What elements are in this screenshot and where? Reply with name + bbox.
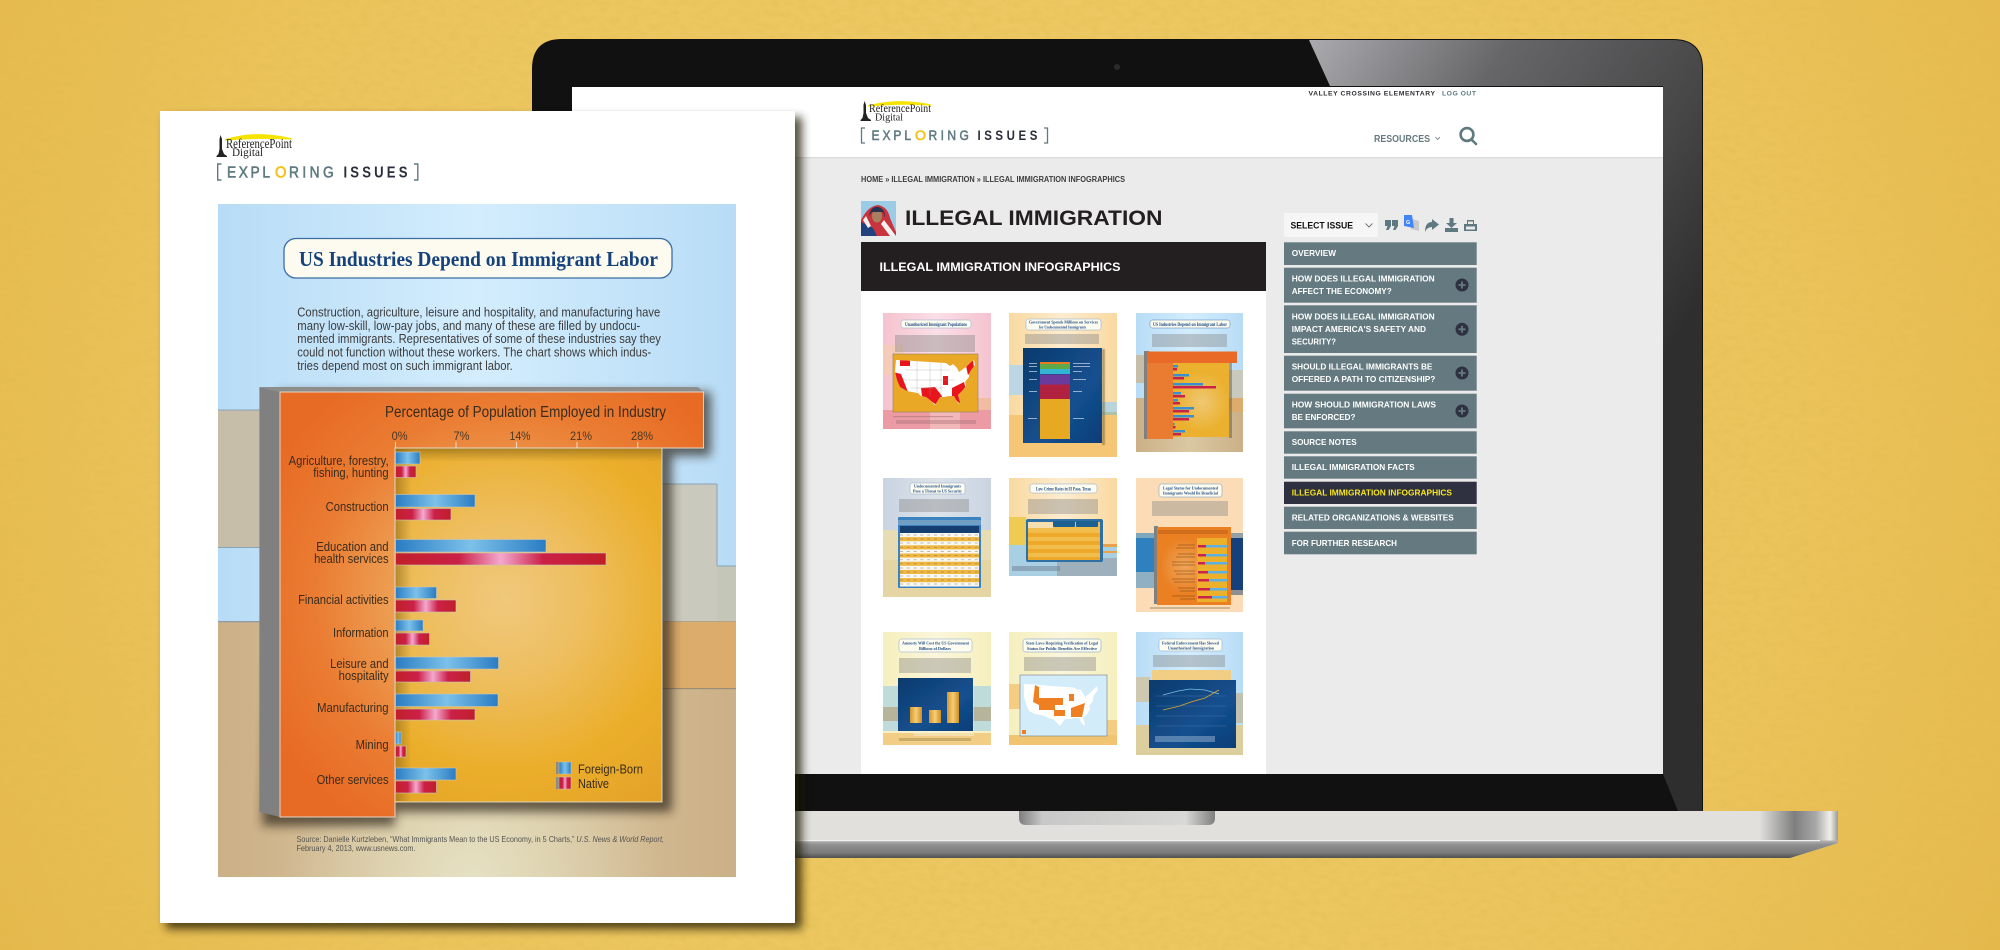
thumbnail: state verification laws map: Status for Public Benefits Are Effective (1027, 646, 1097, 651)
intro paragraph (297, 304, 661, 373)
category labels: Education and (316, 539, 389, 554)
menu item: SECURITY? (1292, 336, 1336, 346)
thumbnail: amnesty cost bar chart (883, 632, 991, 745)
menu item (1284, 507, 1477, 529)
menu item: AFFECT THE ECONOMY? (1292, 286, 1392, 296)
menu item: SHOULD ILLEGAL IMMIGRANTS BE (1292, 362, 1433, 372)
thumbnail: state verification laws map (1009, 632, 1117, 745)
menu item (1284, 305, 1477, 353)
issue title: ILLEGAL IMMIGRATION (905, 207, 1162, 230)
resources menu: RESOURCES (1374, 134, 1430, 145)
category labels (289, 453, 389, 787)
thumbnail: US industries depend on immigrant labor (1136, 313, 1243, 452)
menu item: HOW DOES ILLEGAL IMMIGRATION (1292, 274, 1435, 284)
thumbnail: federal enforcement line chart: Federal Enforcement Has Slowed (1162, 640, 1219, 646)
chart plot area (395, 448, 662, 802)
site wordmark: Exploring Issues: RING (928, 127, 969, 143)
category labels: Financial activities (298, 592, 389, 607)
x axis: 7% (454, 429, 470, 443)
thumbnail: legal status would be beneficial: Legal Status for Undocumented (1163, 486, 1218, 490)
menu item: active: ILLEGAL IMMIGRATION INFOGRAPHICS (1292, 487, 1452, 497)
thumbnail: US industries depend on immigrant labor: US Industries Depend on Immigrant Labor (1153, 323, 1228, 328)
menu item: RELATED ORGANIZATIONS & WEBSITES (1292, 513, 1454, 523)
menu item (1284, 456, 1477, 479)
intro paragraph: tries depend most on such immigrant labor. (297, 358, 513, 373)
site wordmark: Exploring Issues: O (915, 127, 926, 143)
thumbnail: threat to US security table: Undocumented Immigrants (914, 484, 961, 489)
source note: February 4, 2013, www.usnews.com. (296, 843, 416, 853)
logo: ReferencePoint Digital (216, 135, 292, 159)
gallery heading bar: ILLEGAL IMMIGRATION INFOGRAPHICS (880, 262, 1121, 274)
x axis: 14% (510, 429, 531, 443)
menu item: IMPACT AMERICA'S SAFETY AND (1292, 324, 1426, 334)
thumbnail: low crime rates in El Paso (1009, 478, 1117, 576)
wordmark: Exploring Issues: EXPL (227, 164, 270, 182)
menu item: OFFERED A PATH TO CITIZENSHIP? (1292, 374, 1435, 384)
icon: download (1445, 218, 1458, 232)
thumbnail: government spending: Government Spends Millions on Services (1029, 320, 1098, 325)
issue photo: person in flag (861, 201, 896, 236)
intro paragraph: mented immigrants. Representatives of some of these industries say they (297, 331, 661, 346)
thumbnail: amnesty cost bar chart: Amnesty Will Cost the US Government (902, 640, 969, 646)
site wordmark: Exploring Issues (862, 127, 1048, 143)
category labels: Construction (326, 499, 389, 514)
site logo: ReferencePoint Digital (860, 101, 932, 124)
sidebar navigation (1284, 242, 1477, 554)
menu item: ILLEGAL IMMIGRATION FACTS (1292, 462, 1415, 472)
thumbnail: federal enforcement line chart (1136, 632, 1243, 755)
site logo: ReferencePoint Digital: Digital (875, 112, 903, 124)
toolbar icons (1385, 215, 1477, 232)
menu item: HOW DOES ILLEGAL IMMIGRATION (1292, 311, 1435, 321)
intro paragraph: could not function without these workers. The chart shows which indus- (297, 344, 651, 360)
x axis (392, 429, 653, 448)
thumbnail: low crime rates in El Paso: Low Crime Rates in El Paso, Texas (1036, 487, 1091, 492)
category labels: hospitality (339, 668, 389, 683)
menu item: BE ENFORCED? (1292, 412, 1355, 422)
x axis: 28% (631, 429, 653, 443)
icon: share (1425, 219, 1439, 232)
thumbnail: state verification laws map: State Laws Requiring Verification of Legal (1026, 640, 1099, 646)
paper shadow (166, 117, 802, 929)
account links: LOG OUT (1442, 90, 1477, 97)
x axis: 21% (570, 429, 592, 443)
menu item (1284, 356, 1477, 391)
thumbnail: government spending: for Undocumented Immigrants (1039, 324, 1086, 330)
category labels: Mining (356, 737, 389, 752)
infographic artwork (218, 204, 736, 877)
chart header and label column (280, 392, 704, 817)
menu item (1284, 431, 1477, 454)
issue selector (1284, 213, 1378, 237)
logo: ReferencePoint Digital: Digital (232, 145, 264, 159)
site header bar (572, 87, 1663, 158)
legend (556, 762, 643, 791)
bars (396, 452, 606, 793)
thumbnail: legal status would be beneficial: Immigrants Would Be Beneficial (1163, 490, 1219, 496)
laptop (532, 39, 1838, 858)
site wordmark: Exploring Issues: EXPL (872, 127, 911, 143)
icon: search (1461, 128, 1476, 144)
category labels: Agriculture, forestry, (289, 453, 389, 468)
thumbnail: federal enforcement line chart: Unauthorized Immigration (1168, 646, 1214, 650)
legend: Native (578, 776, 609, 791)
menu item (1284, 532, 1477, 554)
thumbnail: amnesty cost bar chart: Billions of Dollars (919, 646, 951, 651)
category labels: Other services (317, 772, 389, 787)
thumbnail: legal status would be beneficial (1136, 478, 1243, 612)
menu item: SOURCE NOTES (1292, 437, 1357, 447)
menu item: OVERVIEW (1292, 248, 1337, 258)
category labels: Manufacturing (317, 700, 389, 715)
icon: quote (1385, 220, 1398, 230)
category labels: fishing, hunting (313, 465, 389, 480)
thumbnail: unauthorized immigrant populations: Unauthorized Immigrant Populations (905, 323, 967, 328)
menu item (1284, 268, 1477, 303)
laptop lid and bezel (532, 39, 1703, 811)
menu item: active (1284, 482, 1477, 504)
chart title pill: US Industries Depend on Immigrant Labor (299, 247, 658, 271)
breadcrumb: HOME » ILLEGAL IMMIGRATION » ILLEGAL IMMIGRATION INFOGRAPHICS (861, 175, 1126, 184)
wordmark: Exploring Issues: RING (289, 164, 334, 182)
legend: Foreign-Born (578, 762, 643, 776)
thumbnail: threat to US security table (883, 478, 991, 597)
x axis: 0% (392, 429, 408, 443)
source note (296, 834, 664, 853)
menu item (1284, 394, 1477, 428)
gallery heading bar (861, 242, 1266, 291)
panel: infographics gallery (861, 242, 1266, 774)
thumbnail: government spending (1009, 313, 1117, 457)
intro paragraph: many low-skill, low-pay jobs, and many of these are filled by undocu- (297, 318, 640, 333)
thumbnail: threat to US security table: Pose a Threat to US Security (913, 488, 963, 494)
chart 3D side (259, 387, 704, 817)
wordmark: Exploring Issues: O (275, 164, 286, 182)
site logo: ReferencePoint Digital: ReferencePoint (869, 101, 932, 115)
laptop screen (572, 87, 1663, 774)
bar chart (259, 387, 704, 817)
icon: translate: G (1406, 220, 1410, 226)
menu item: FOR FURTHER RESEARCH (1292, 538, 1397, 548)
account links: VALLEY CROSSING ELEMENTARY (1308, 90, 1435, 97)
artwork background (218, 204, 736, 877)
logo: ReferencePoint Digital: ReferencePoint (226, 136, 292, 151)
wordmark: Exploring Issues: ISSUES (344, 164, 408, 182)
intro paragraph: Construction, agriculture, leisure and hospitality, and manufacturing have (297, 304, 660, 320)
source note: Source: Danielle Kurtzleben, “What Immigrants Mean to the US Economy, in 5 Charts,” U.S. News & World Report, (296, 834, 664, 844)
category labels: health services (314, 551, 389, 566)
site wordmark: Exploring Issues: ISSUES (978, 127, 1038, 143)
chart heading: Percentage of Population Employed in Industry (385, 404, 666, 421)
panel: printed infographic sheet (160, 111, 795, 923)
issue selector: SELECT ISSUE (1290, 220, 1353, 232)
menu item: HOW SHOULD IMMIGRATION LAWS (1292, 399, 1436, 409)
icon: print (1464, 220, 1477, 231)
menu item (1284, 242, 1477, 265)
category labels: Information (333, 625, 389, 640)
laptop base (780, 811, 1838, 858)
wordmark: Exploring Issues (218, 164, 418, 182)
bar chart shadow (262, 392, 711, 826)
chart title pill (284, 238, 672, 278)
thumbnail: unauthorized immigrant populations (883, 313, 991, 429)
category labels: Leisure and (330, 656, 389, 671)
